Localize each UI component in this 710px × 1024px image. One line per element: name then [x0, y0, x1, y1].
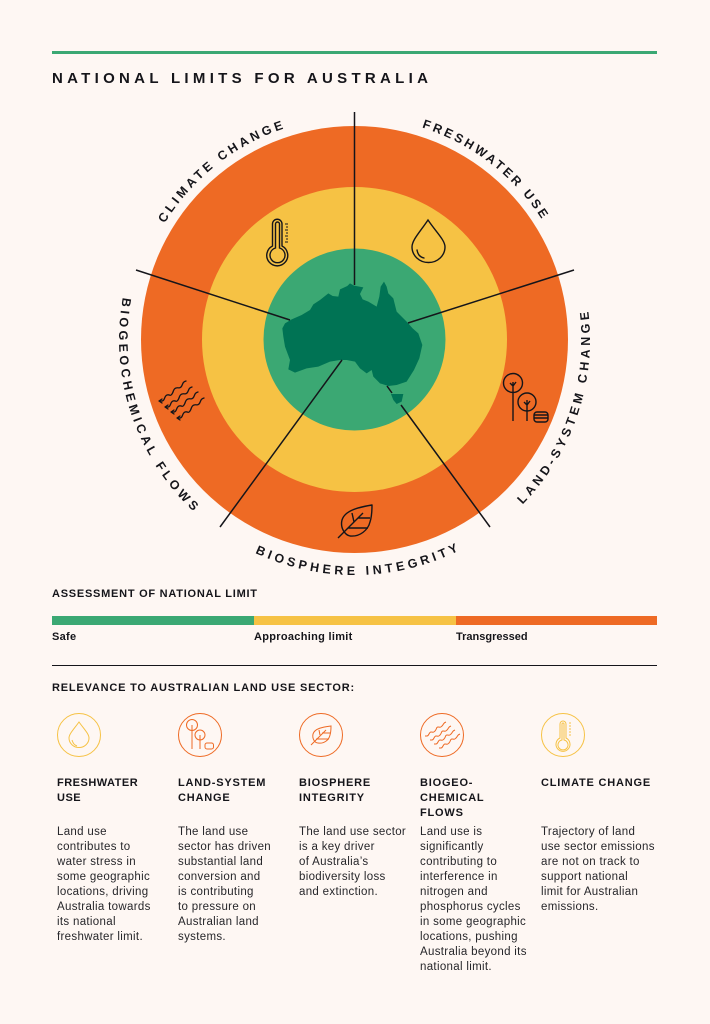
concentric rings	[141, 126, 568, 553]
body text: is a key driver	[299, 841, 375, 853]
legend label: approaching limit: Approaching limit	[254, 631, 353, 643]
body text: freshwater limit.	[57, 931, 143, 943]
heading: CHEMICAL	[420, 792, 484, 804]
body text: significantly	[420, 841, 484, 853]
body text: support national	[541, 871, 628, 883]
icon: leaf	[338, 505, 372, 538]
body text: nitrogen and	[420, 886, 488, 898]
icon: biogeochemical	[420, 714, 464, 756]
column: freshwater use	[57, 777, 151, 943]
heading	[299, 777, 371, 804]
body text: interference in	[420, 871, 498, 883]
column: biosphere integrity	[299, 777, 406, 898]
legend bar	[52, 616, 657, 625]
heading: FLOWS	[420, 807, 464, 819]
body text: contributes to	[57, 841, 131, 853]
body text: The land use sector	[299, 826, 406, 838]
body text: systems.	[178, 931, 226, 943]
body text: emissions.	[541, 901, 599, 913]
heading: CLIMATE CHANGE	[541, 777, 651, 789]
body text: Trajectory of land	[541, 826, 635, 838]
column: land-system change	[178, 777, 271, 943]
column icons	[57, 713, 585, 757]
label: land-system change: LAND-SYSTEM CHANGE	[516, 312, 590, 504]
body text: to pressure on	[178, 901, 256, 913]
heading: BIOGEO-	[420, 777, 473, 789]
title: NATIONAL LIMITS FOR AUSTRALIA	[52, 70, 432, 87]
column: biogeochemical flows	[420, 777, 527, 973]
body text: water stress in	[57, 856, 136, 868]
label: climate change: CLIMATE CHANGE	[159, 120, 284, 222]
top rule	[52, 51, 657, 54]
body text: substantial land	[178, 856, 263, 868]
body text: national limit.	[420, 961, 492, 973]
body text: is contributing	[178, 886, 254, 898]
icon: biosphere	[300, 714, 342, 756]
column: climate change	[541, 777, 655, 913]
body text: biodiversity loss	[299, 871, 386, 883]
body text	[299, 826, 406, 898]
map of Australia	[282, 282, 422, 404]
heading: BIOSPHERE	[299, 777, 371, 789]
heading: CHANGE	[178, 792, 230, 804]
body text: its national	[57, 916, 116, 928]
icon: nutrient flows	[159, 381, 204, 420]
sector dividers	[136, 112, 574, 527]
icon: trees and logs	[504, 374, 548, 422]
body text: Australia towards	[57, 901, 151, 913]
body text: some geographic	[57, 871, 150, 883]
heading	[420, 777, 484, 819]
icon: climate	[542, 714, 584, 756]
body text: Australia beyond its	[420, 946, 527, 958]
body text	[57, 826, 151, 943]
icon: land-system	[178, 714, 222, 756]
body text	[420, 826, 527, 973]
body text: locations, driving	[57, 886, 148, 898]
body text: contributing to	[420, 856, 497, 868]
heading: USE	[57, 792, 81, 804]
body text: sector has driven	[178, 841, 271, 853]
label: biosphere integrity: BIOSPHERE INTEGRITY	[256, 543, 456, 575]
body text: phosphorus cycles	[420, 901, 521, 913]
section heading: RELEVANCE TO AUSTRALIAN LAND USE SECTOR:	[52, 682, 355, 694]
body text: Land use is	[420, 826, 482, 838]
legend heading: ASSESSMENT OF NATIONAL LIMIT	[52, 588, 258, 600]
boundary diagram	[118, 112, 590, 575]
heading	[57, 777, 138, 804]
body text: limit for Australian	[541, 886, 638, 898]
heading: FRESHWATER	[57, 777, 138, 789]
body text: in some geographic	[420, 916, 526, 928]
body text: are not on track to	[541, 856, 640, 868]
body text: The land use	[178, 826, 248, 838]
body text: and extinction.	[299, 886, 378, 898]
body text	[541, 826, 655, 913]
label: biogeochemical flows: BIOGEOCHEMICAL FLOWS	[118, 298, 198, 510]
heading	[178, 777, 266, 804]
body text: use sector emissions	[541, 841, 655, 853]
legend label: safe: Safe	[52, 631, 76, 643]
icon: thermometer	[267, 219, 288, 266]
body text: conversion and	[178, 871, 260, 883]
heading: LAND-SYSTEM	[178, 777, 266, 789]
section divider	[52, 665, 657, 666]
body text	[178, 826, 271, 943]
icon: water drop	[412, 220, 445, 262]
body text: locations, pushing	[420, 931, 518, 943]
heading: INTEGRITY	[299, 792, 365, 804]
body text: Australian land	[178, 916, 259, 928]
label: freshwater use: FRESHWATER USE	[422, 120, 548, 218]
body text: of Australia’s	[299, 856, 368, 868]
body text: Land use	[57, 826, 107, 838]
legend label: transgressed: Transgressed	[456, 631, 528, 643]
icon: freshwater	[58, 714, 100, 756]
